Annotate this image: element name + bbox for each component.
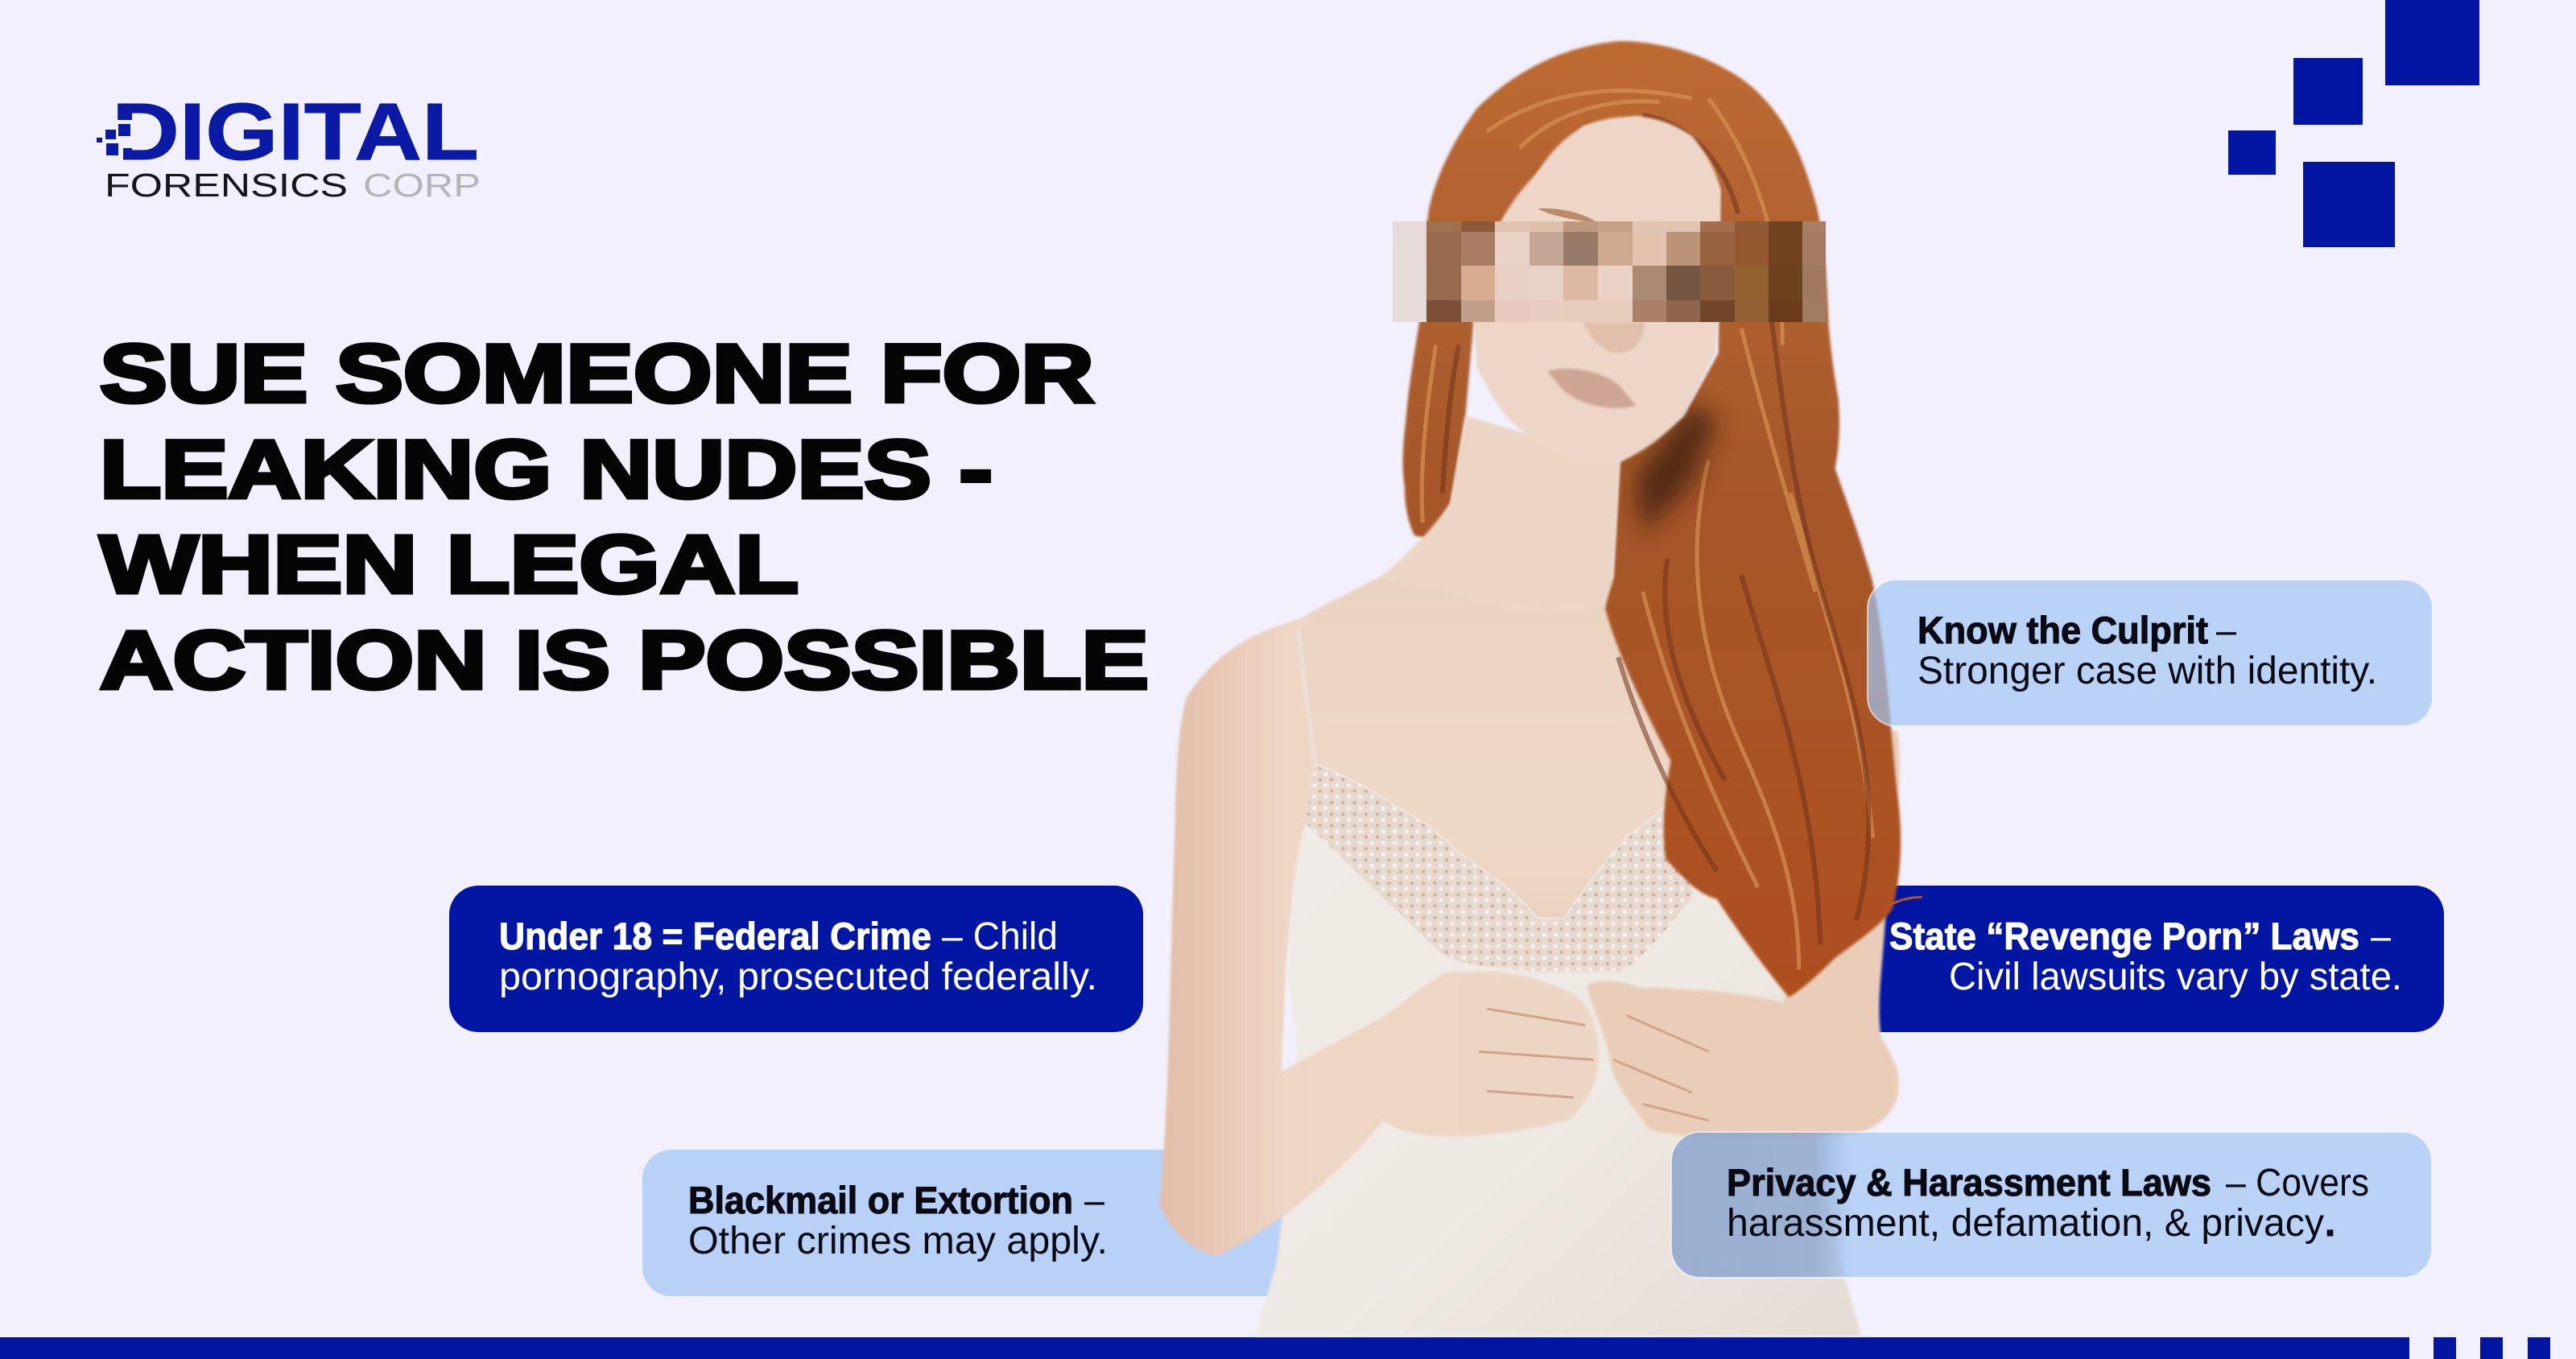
title: LEAKING NUDES - [100,423,993,515]
hair strands [1422,91,1873,969]
neck [1380,415,1620,611]
callout: Privacy and Harassment Laws [1671,1132,2432,1278]
callout: Blackmail or Extortion: Other crimes may apply. [688,1220,1108,1262]
callout: Privacy and Harassment Laws: – Covers [2226,1162,2369,1204]
right arm [1587,723,1900,1139]
logo: Digital Forensics Corp [97,87,481,204]
left arm [1160,611,1599,1255]
callout: State Revenge Porn Laws: State “Revenge Porn” Laws [1889,915,2359,957]
callout: Blackmail or Extortion: Blackmail or Extortion [688,1179,1073,1221]
mouth [1547,369,1637,408]
callout: Know the Culprit: – [2216,609,2236,652]
fingers [1479,1009,1708,1121]
title: SUE SOMEONE FOR [100,328,1094,419]
callout: State Revenge Porn Laws: Civil lawsuits vary by state. [1949,956,2402,998]
callout: Under 18: Under 18 = Federal Crime [499,915,931,957]
torso [1296,576,1889,1018]
shadow under jaw [1635,403,1717,534]
title [100,328,1149,706]
pixelated privacy bar over eyes [1393,221,1826,322]
callout: Blackmail or Extortion [642,1150,1335,1296]
gown [1255,764,1861,1336]
callout: Privacy and Harassment Laws: Privacy & Harassment Laws [1727,1161,2211,1204]
callout: Privacy and Harassment Laws: harassment, defamation, & privacy [1727,1202,2324,1245]
bottom bar with stripes [0,1337,2550,1359]
callout: Know the Culprit: Know the Culprit [1918,609,2208,651]
logo: Digital Forensics Corp: DIGITAL [112,87,479,177]
figure: woman with red hair in a white slip [1160,41,1922,1336]
callout: Blackmail or Extortion: – [1084,1179,1104,1222]
callout: State Revenge Porn Laws: – [2371,915,2391,958]
logo: Digital Forensics Corp: FORENSICS [105,167,348,204]
callout: Under 18: – Child [942,915,1058,958]
title: WHEN LEGAL [100,518,799,610]
face [1474,117,1720,464]
callout: Privacy and Harassment Laws: . [2325,1201,2335,1244]
hair wisp [1886,897,1922,907]
callout: Know the Culprit: Stronger case with identity. [1918,650,2377,692]
logo: Digital Forensics Corp: CORP [363,167,481,204]
gown strap [1296,621,1315,764]
nose shadow [1583,322,1645,353]
eyebrow [1538,209,1599,224]
callout: Under 18 [449,886,1143,1032]
callout: Under 18: pornography, prosecuted federally. [499,956,1097,998]
title: ACTION IS POSSIBLE [100,614,1149,706]
gown lace trim [1301,764,1700,973]
hair [1403,41,1901,998]
callout: State Revenge Porn Laws [1811,886,2444,1032]
decorative squares: top right [2228,0,2479,247]
callout: Know the Culprit [1868,580,2433,726]
